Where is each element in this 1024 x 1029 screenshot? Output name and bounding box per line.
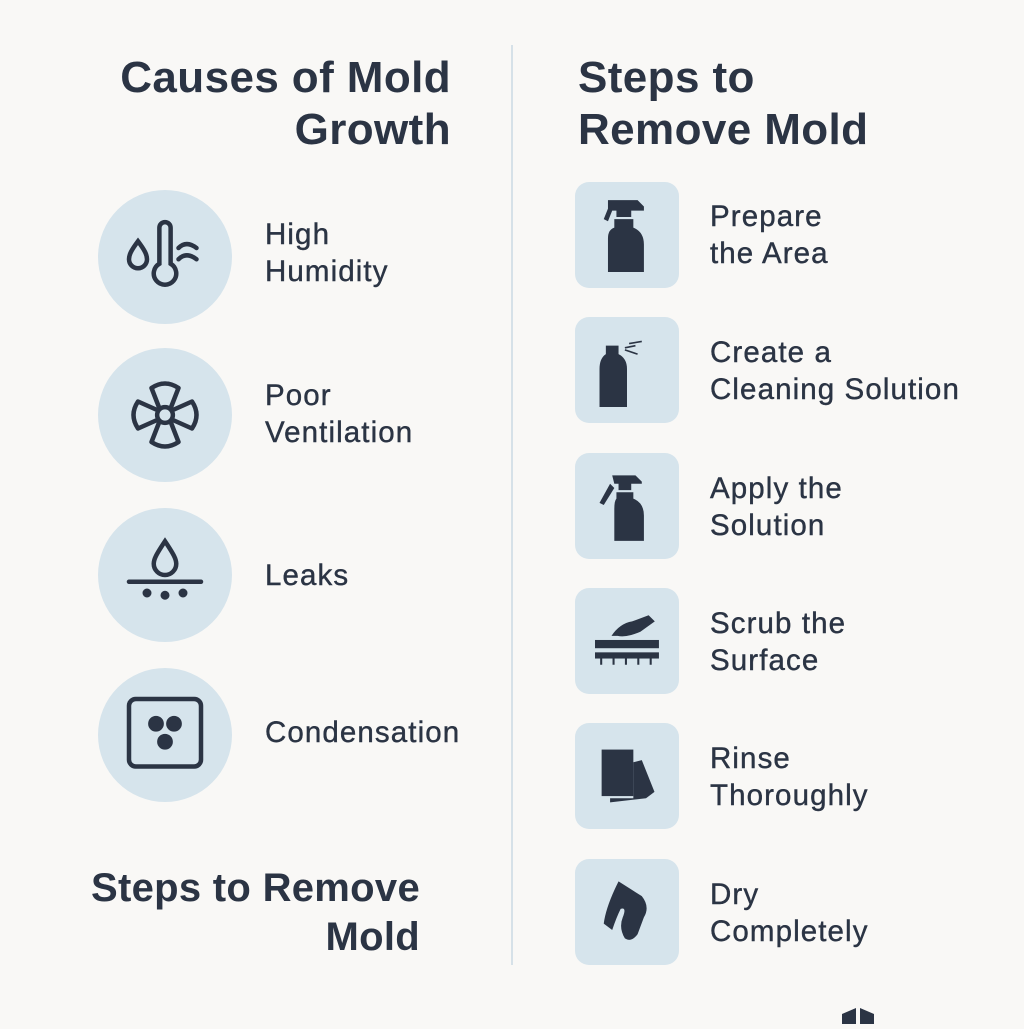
- icon: humidity: [98, 190, 232, 324]
- title: causes: Growth: [295, 105, 451, 154]
- label: Solution: [710, 509, 825, 542]
- label: Rinse: [710, 742, 791, 775]
- step 6: [575, 859, 869, 965]
- icon: cloths: [575, 723, 679, 829]
- label: the Area: [710, 237, 829, 270]
- label: Ventilation: [265, 416, 413, 449]
- title: steps: Remove Mold: [578, 105, 868, 154]
- label: Poor: [265, 379, 332, 412]
- label: Scrub the: [710, 607, 846, 640]
- label: Prepare: [710, 200, 823, 233]
- step 1: [575, 182, 829, 288]
- icon: rag: [575, 859, 679, 965]
- step 2: [575, 317, 960, 423]
- label: Thoroughly: [710, 779, 869, 812]
- label: [264, 379, 413, 449]
- label: [710, 607, 846, 677]
- cause: leaks: [98, 508, 349, 642]
- label: [710, 742, 869, 812]
- cause: high humidity: [98, 190, 389, 324]
- title: causes: Causes of Mold: [120, 53, 451, 102]
- label: High: [265, 218, 330, 251]
- step 4: [575, 588, 846, 694]
- icon: spray bottle: [575, 453, 679, 559]
- step 3: [575, 453, 843, 559]
- label: [710, 336, 960, 406]
- icon: fan: [98, 348, 232, 482]
- label: [265, 218, 389, 288]
- label: Humidity: [265, 255, 389, 288]
- icon: condensation: [98, 668, 232, 802]
- label: Cleaning Solution: [710, 373, 960, 406]
- label: [710, 200, 829, 270]
- label: [710, 878, 869, 948]
- divider: [511, 45, 513, 965]
- label: Surface: [710, 644, 819, 677]
- label: [710, 472, 843, 542]
- label: Dry: [710, 878, 759, 911]
- label: Apply the: [710, 472, 843, 505]
- title: steps: [578, 53, 868, 154]
- icon: scrub brush: [575, 588, 679, 694]
- logo fragment: [842, 1008, 874, 1024]
- label: Create a: [710, 336, 832, 369]
- icon: spray can: [575, 317, 679, 423]
- bottom-left heading: [91, 866, 420, 959]
- bottom-left heading: Mold: [325, 915, 420, 959]
- title: causes: [120, 53, 451, 154]
- cause: condensation: [98, 668, 460, 802]
- icon: leak: [98, 508, 232, 642]
- icon: spray bottle: [575, 182, 679, 288]
- bottom-left heading: Steps to Remove: [91, 866, 420, 910]
- label: Condensation: [265, 716, 460, 749]
- label: Leaks: [265, 559, 349, 592]
- title: steps: Steps to: [578, 53, 755, 102]
- cause: poor ventilation: [98, 348, 413, 482]
- label: Completely: [710, 915, 869, 948]
- step 5: [575, 723, 869, 829]
